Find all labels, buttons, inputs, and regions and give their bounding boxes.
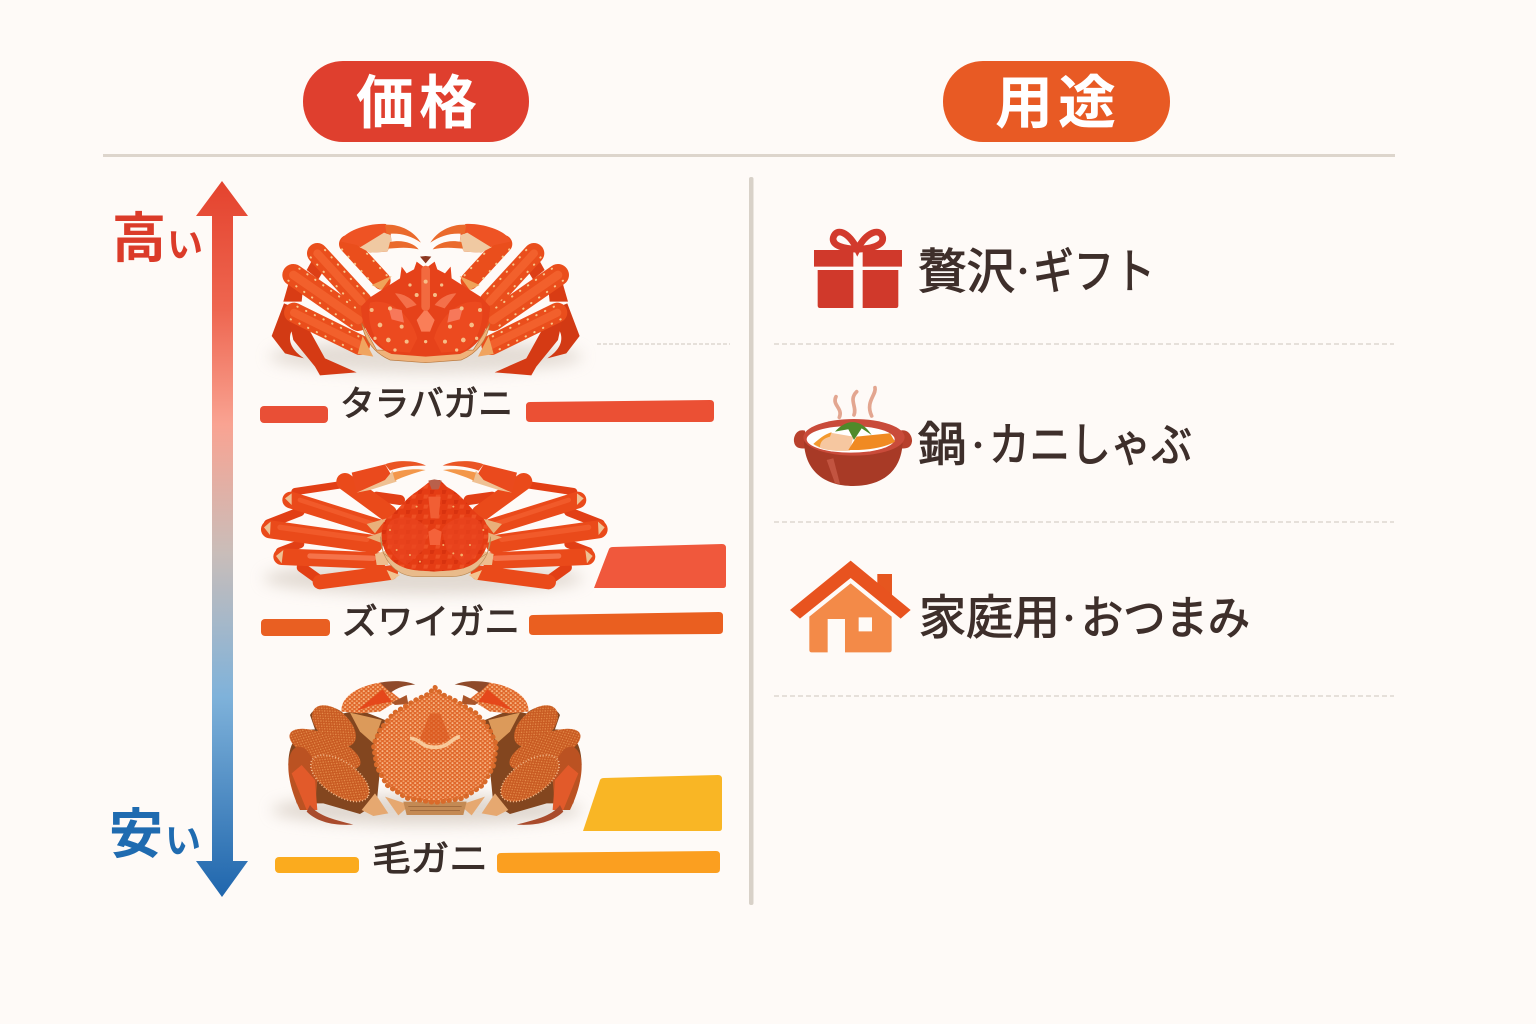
text: hot pot and shabu-shabu: カニしゃぶ (989, 419, 1192, 471)
icon: house (790, 561, 911, 652)
heading: price (303, 61, 529, 142)
crab: king crab (269, 224, 582, 375)
text: hot pot and shabu-shabu: 鍋 (918, 418, 967, 471)
label: high price: 高い (112, 209, 203, 269)
text: luxury gift (918, 246, 1155, 299)
heading: usage: 用途 (995, 71, 1116, 136)
heading: price: 価格 (356, 71, 477, 136)
text: home and snacks: 家庭用 (919, 591, 1060, 644)
highlight bar: snow crab (594, 544, 726, 588)
bars: taraba crab (260, 400, 714, 423)
text: hot pot and shabu-shabu (918, 418, 1192, 471)
label: taraba crab: タラバガニ (340, 385, 513, 424)
crab: horsehair crab (272, 681, 586, 825)
heading: usage (943, 61, 1170, 142)
crab: snow crab (263, 461, 605, 594)
icon: gift (814, 232, 902, 308)
text: home and snacks: おつまみ (1081, 592, 1250, 644)
icon: hot pot (794, 388, 912, 486)
bars: horsehair crab (275, 851, 720, 873)
text: luxury gift: 贅沢 (918, 246, 1015, 299)
label: snow crab: ズワイガニ (342, 603, 520, 642)
label: horsehair crab: 毛ガニ (372, 840, 488, 879)
text: home and snacks (919, 591, 1250, 644)
label: low price: 安い (109, 805, 201, 865)
bars: snow crab (261, 612, 723, 636)
text: luxury gift: ギフト (1033, 246, 1155, 299)
highlight bar: horsehair crab (583, 775, 722, 831)
price axis arrow (196, 181, 248, 897)
